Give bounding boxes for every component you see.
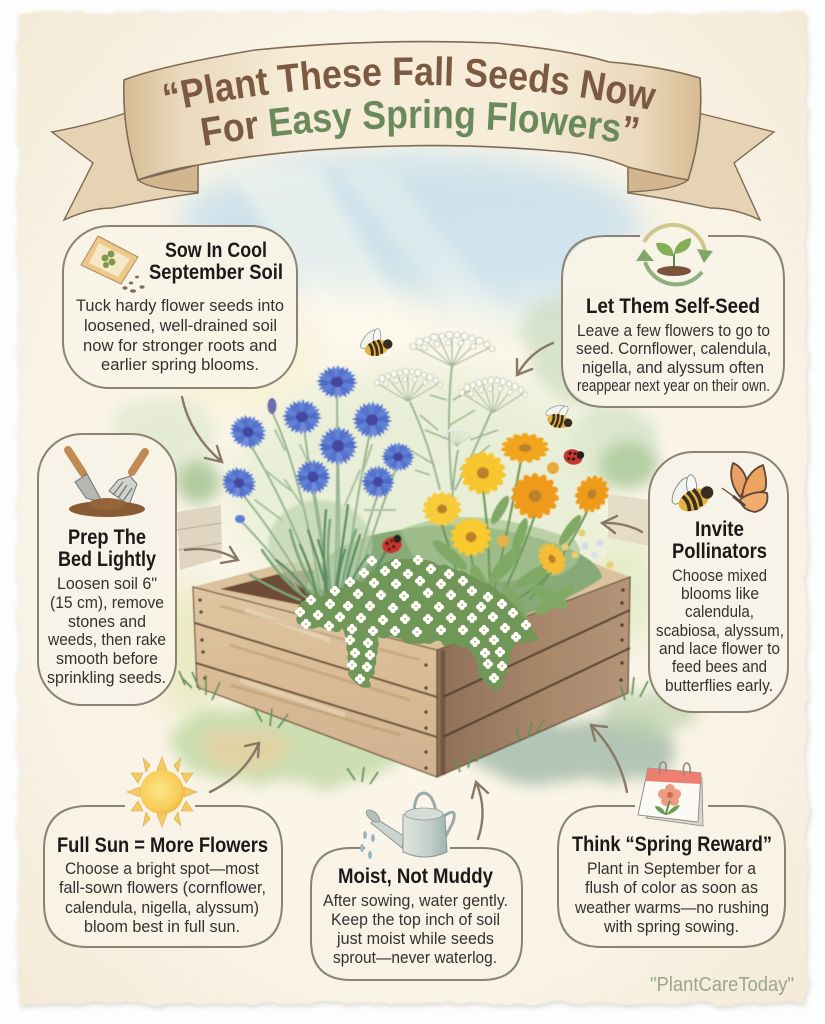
flowers: white lace flower (374, 332, 527, 520)
panel: invite pollinators: feed bees and (672, 658, 767, 676)
panel: sow in cool september soil: September Soil (149, 261, 283, 284)
grass tufts (179, 671, 648, 784)
body text: Loosen soil 6" (57, 575, 157, 593)
panel: prep the bed lightly: stones and (68, 613, 146, 631)
panel: think spring reward: flush of color as soon as (585, 879, 758, 897)
heading: Sow In Cool (165, 239, 267, 262)
arrow: prep to box (185, 547, 238, 563)
flowers: calendula (422, 433, 616, 628)
watercolor sky and garden wash (115, 152, 700, 785)
panel: moist, not muddy: Keep the top inch of soil (331, 911, 500, 929)
icon: seed packet (81, 236, 145, 293)
background raised bed right (600, 441, 656, 546)
panel: prep the bed lightly: Bed Lightly (58, 548, 156, 571)
title line 2: For Easy Spring Flowers” (201, 99, 639, 146)
banner main ribbon (124, 42, 701, 180)
arrow: spring reward to box (591, 725, 627, 792)
arrow: self-seed to lace flower (517, 343, 553, 375)
panel: full sun (44, 757, 282, 947)
panel: invite pollinators: Pollinators (672, 540, 767, 563)
panel: full sun: bloom best in full sun. (84, 918, 240, 936)
panel: sow in cool september soil: now for stronger roots and (83, 337, 277, 355)
panel: invite pollinators: blooms like (681, 585, 759, 603)
arrow: sow to plants (182, 397, 222, 462)
arrow: full sun to box (210, 743, 259, 792)
box left face (193, 587, 437, 777)
heading: Prep The (68, 526, 146, 549)
bee right (541, 399, 577, 431)
panel: moist, not muddy (311, 793, 522, 980)
flowers: cornflower plant (217, 365, 415, 604)
heading: Moist, Not Muddy (338, 865, 493, 888)
banner left tail (52, 113, 198, 220)
title banner (50, 40, 776, 222)
arrow: pollinators to flowers (602, 516, 642, 533)
icon: sun (127, 757, 197, 827)
panel: prep the bed lightly: smooth before (56, 650, 158, 668)
calendula foliage (442, 455, 590, 610)
panel: let them self-seed: nigella, and alyssum often (582, 359, 764, 377)
ladybug on stem (380, 534, 405, 556)
cornflower blossoms (217, 365, 415, 523)
panel: full sun: calendula, nigella, alyssum) (65, 899, 259, 917)
panel: prep the bed lightly: weeds, then rake (47, 631, 166, 649)
foliage mass behind flowers (268, 500, 602, 640)
body text: Plant in September for a (587, 860, 757, 878)
background raised bed left (176, 460, 222, 570)
bee top (354, 324, 395, 360)
box right face (437, 577, 630, 777)
icon: butterfly (722, 463, 768, 512)
panel: moist, not muddy: sprout—never waterlog. (333, 949, 497, 967)
small yellow and blue filler flowers (562, 530, 614, 568)
box rim and soil (193, 560, 630, 650)
heading: Full Sun = More Flowers (57, 834, 268, 857)
ladybug right (562, 447, 585, 467)
body text: Leave a few flowers to go to (577, 322, 770, 340)
icon: calendar (638, 762, 703, 826)
panel: invite pollinators: scabiosa, alyssum, (656, 622, 784, 640)
panel: let them self-seed: seed. Cornflower, calendula, (576, 340, 771, 358)
panel: invite pollinators: butterflies early. (665, 677, 773, 695)
icon: watering can (360, 793, 454, 859)
panel: think spring reward (558, 762, 785, 947)
panel: let them self-seed (562, 225, 784, 407)
panel: let them self-seed: reappear next year on their own. (577, 377, 770, 395)
calendula blossoms (422, 433, 616, 581)
banner right tail (628, 113, 774, 220)
icon: bee (661, 466, 717, 519)
panel: think spring reward: with spring sowing. (603, 918, 739, 936)
panel: moist, not muddy: just moist while seeds (336, 930, 494, 948)
body text: Tuck hardy flower seeds into (76, 297, 284, 315)
body text: Choose mixed (672, 567, 767, 585)
cornflower foliage (240, 392, 410, 604)
heading: Think “Spring Reward” (572, 833, 772, 856)
panel: prep the bed lightly: (15 cm), remove (50, 594, 164, 612)
body text: After sowing, water gently. (323, 892, 508, 910)
panel: full sun: fall-sown flowers (cornflower, (59, 879, 266, 897)
body text: Choose a bright spot—most (65, 860, 259, 878)
panel: invite pollinators (649, 452, 788, 712)
banner folds (138, 165, 198, 192)
panel: prep the bed lightly: sprinkling seeds. (47, 669, 166, 687)
arrow: moist to box (472, 782, 488, 839)
heading: Invite (695, 518, 744, 541)
raised wooden planter box (179, 560, 648, 784)
panel: invite pollinators: calendula, (685, 603, 754, 621)
panel: sow in cool september soil: loosened, well-drained soil (84, 317, 277, 335)
panel: sow in cool september soil (63, 226, 297, 388)
icon: sprout cycle (636, 225, 713, 284)
watermark: "PlantCareToday" (650, 974, 794, 996)
heading: Let Them Self-Seed (586, 295, 760, 318)
panel: prep the bed lightly (38, 434, 176, 705)
title line 1: “Plant These Fall Seeds Now (164, 56, 656, 110)
flowers: white alyssum (295, 555, 536, 690)
panel: invite pollinators: and lace flower to (659, 640, 780, 658)
panel: think spring reward: weather warms—no rushing (574, 899, 769, 917)
panel: sow in cool september soil: earlier spring blooms. (101, 356, 259, 374)
icon: trowel and fork (68, 450, 145, 517)
